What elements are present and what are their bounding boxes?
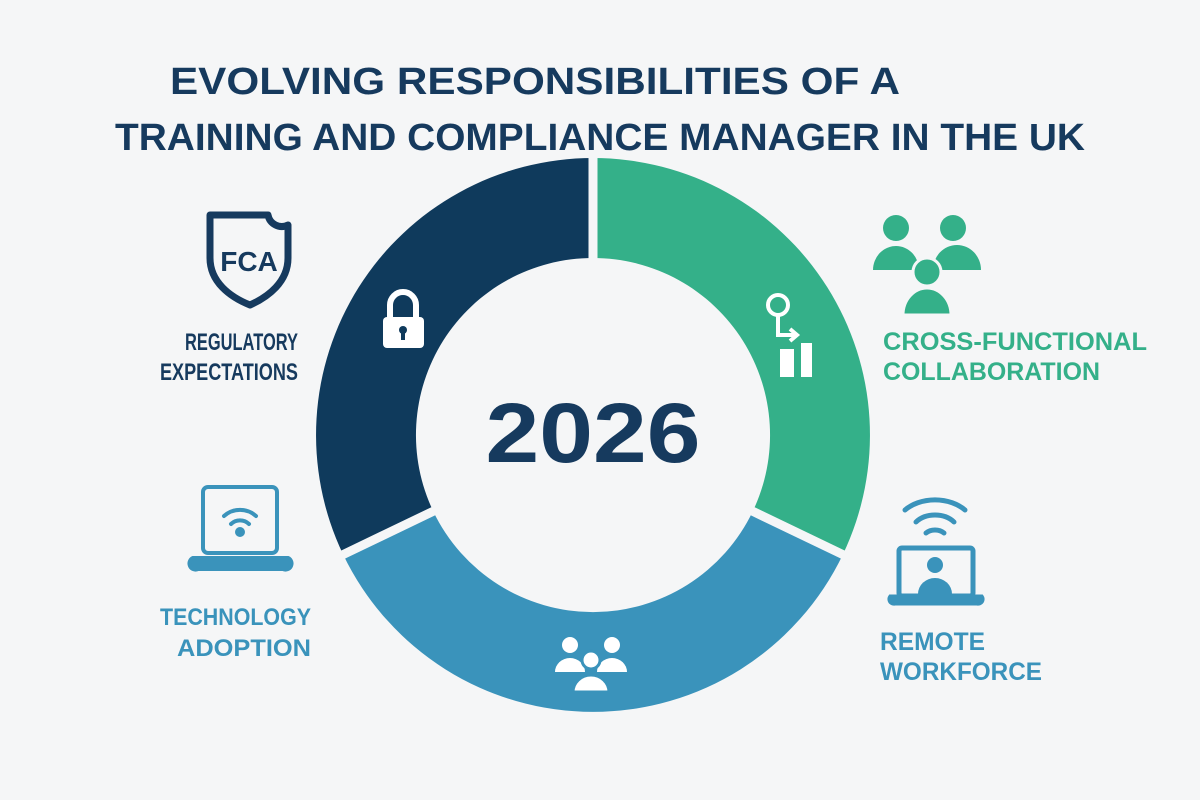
label: cross-functional collaboration: COLLABORATION (883, 358, 1100, 386)
icon: group in blue segment (555, 637, 627, 692)
segment: technology (blue) (343, 511, 843, 712)
icon: FCA shield (210, 215, 288, 305)
segment: regulatory (navy) (316, 158, 593, 554)
label: technology adoption: ADOPTION (177, 635, 311, 662)
icon: lock (383, 292, 424, 348)
icon: remote laptop (889, 500, 983, 604)
icon: laptop with wifi (189, 487, 292, 570)
title (115, 61, 1086, 159)
center year: 2026 (486, 386, 700, 480)
label: remote workforce (880, 628, 1042, 686)
icon: people group (873, 215, 981, 315)
label: remote workforce: REMOTE (880, 628, 985, 656)
label: regulatory expectations: REGULATORY (185, 329, 298, 356)
title: EVOLVING RESPONSIBILITIES OF A (170, 61, 900, 103)
title: TRAINING AND COMPLIANCE MANAGER IN THE UK (115, 117, 1086, 159)
segment: collaboration (green) (593, 158, 870, 554)
label: regulatory expectations (160, 329, 298, 386)
label: regulatory expectations: EXPECTATIONS (160, 359, 298, 386)
icon: FCA shield: FCA (220, 246, 278, 277)
donut chart (316, 150, 870, 712)
label: technology adoption: TECHNOLOGY (160, 604, 311, 631)
label: remote workforce: WORKFORCE (880, 658, 1042, 686)
label: cross-functional collaboration: CROSS-FUNCTIONAL (883, 328, 1147, 356)
icon: key and chart (768, 295, 812, 377)
label: technology adoption (160, 604, 311, 662)
label: cross-functional collaboration (883, 328, 1147, 386)
